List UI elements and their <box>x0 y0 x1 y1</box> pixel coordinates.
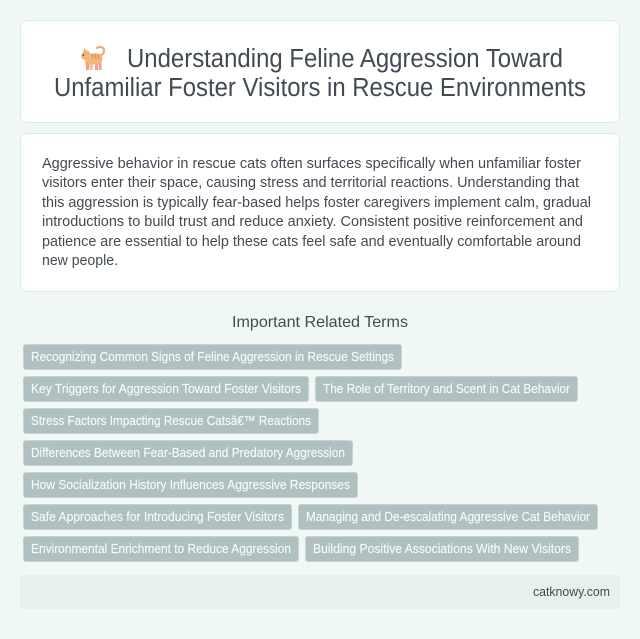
tag: environmental enrichment <box>24 536 298 562</box>
text block: description: this aggression is typically fear-based helps foster caregivers implement calm, gradual <box>42 195 591 211</box>
title: Understanding Feline Aggression Toward <box>127 45 563 73</box>
tag: environmental enrichment: Environmental Enrichment to Reduce Aggression <box>31 542 291 556</box>
tag: socialization history: How Socialization History Influences Aggressive Responses <box>31 478 350 492</box>
tag: safe approaches: Safe Approaches for Introducing Foster Visitors <box>31 510 284 524</box>
panel: description card <box>20 134 620 292</box>
tag: key triggers <box>24 376 308 402</box>
text block: description: Aggressive behavior in rescue cats often surfaces specifically when unfamiliar foster <box>42 156 581 172</box>
tag: positive associations: Building Positive Associations With New Visitors <box>313 542 571 556</box>
text block: description: new people. <box>42 253 118 269</box>
tag: de-escalating: Managing and De-escalating Aggressive Cat Behavior <box>306 510 590 524</box>
tag: stress factors <box>24 408 318 434</box>
title <box>54 45 586 102</box>
footer <box>20 575 620 609</box>
text block: description: visitors enter their space, causing stress and territorial reactions. Understanding that <box>42 175 579 191</box>
tag: positive associations <box>306 536 578 562</box>
footer: site name: catknowy.com <box>533 584 610 599</box>
text block: description <box>42 156 591 269</box>
tag: safe approaches <box>24 504 292 530</box>
text block: description: patience are essential to help these cats feel safe and eventually comfortable around <box>42 234 581 250</box>
text block: description: introductions to build trust and reduce anxiety. Consistent positive reinforcement and <box>42 214 583 230</box>
tag: territory and scent: The Role of Territory and Scent in Cat Behavior <box>323 382 570 396</box>
icon: cat <box>81 47 104 70</box>
panel: title card <box>20 20 620 122</box>
tag: recognizing signs: Recognizing Common Signs of Feline Aggression in Rescue Settings <box>31 350 394 364</box>
panel: related term tags <box>24 344 598 562</box>
heading: related terms: Important Related Terms <box>232 314 408 331</box>
tag: fear-based vs predatory: Differences Between Fear-Based and Predatory Aggression <box>31 446 345 460</box>
tag: de-escalating <box>298 504 598 530</box>
tag: territory and scent <box>316 376 578 402</box>
tag: stress factors: Stress Factors Impacting Rescue Catsâ€™ Reactions <box>31 414 311 428</box>
tag: key triggers: Key Triggers for Aggression Toward Foster Visitors <box>31 382 301 396</box>
tag: recognizing signs <box>24 344 402 370</box>
tag: fear-based vs predatory <box>24 440 352 466</box>
tag: socialization history <box>24 472 358 498</box>
title: Unfamiliar Foster Visitors in Rescue Environments <box>54 74 586 102</box>
